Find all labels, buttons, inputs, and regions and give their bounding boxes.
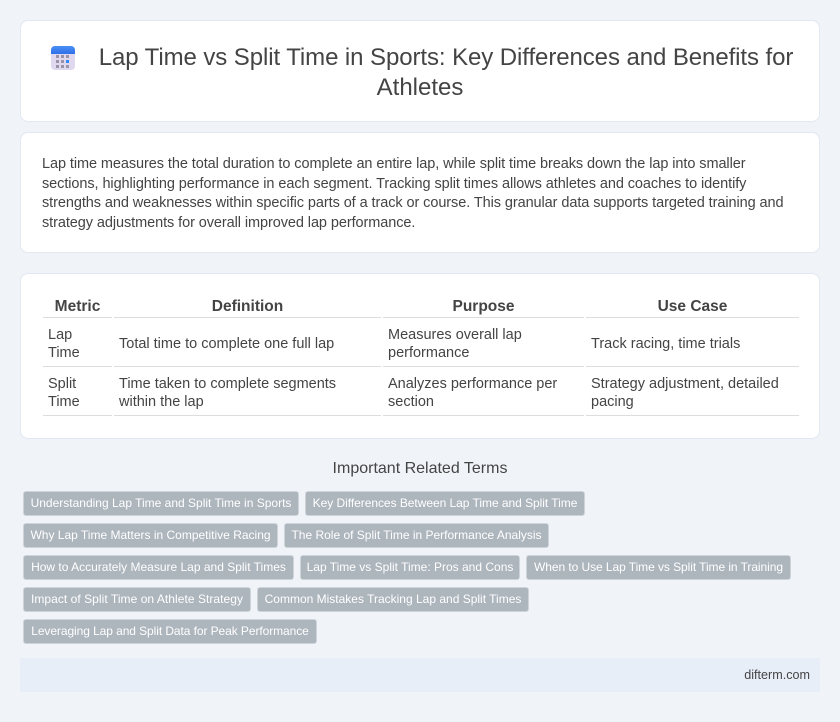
comparison table panel xyxy=(20,273,820,439)
table headers: Purpose xyxy=(452,298,514,315)
title: Lap Time vs Split Time in Sports: Key Differences and Benefits for xyxy=(99,44,793,71)
row: split time: pacing xyxy=(591,394,634,410)
related terms heading: Important Related Terms xyxy=(333,460,507,477)
intro paragraph: Lap time measures the total duration to complete an entire lap, while split time breaks down the lap into smaller xyxy=(42,156,745,172)
related terms tags: Impact of Split Time on Athlete Strategy xyxy=(31,592,243,606)
intro text panel xyxy=(20,132,820,253)
table headers: Metric xyxy=(55,298,100,315)
row: split time: Analyzes performance per xyxy=(388,376,557,392)
row: split time: Split xyxy=(48,376,76,392)
related terms tags xyxy=(23,491,791,644)
row: split time: Time xyxy=(48,394,80,410)
table headers: Use Case xyxy=(658,298,727,315)
row: lap time: performance xyxy=(388,345,469,361)
related terms tags: Common Mistakes Tracking Lap and Split Times xyxy=(265,592,521,606)
row: split time: Strategy adjustment, detailed xyxy=(591,376,779,392)
intro paragraph: strengths and weaknesses within specific parts of a track or course. This granular data supports targeted training and xyxy=(42,195,783,211)
footer bar xyxy=(20,658,820,692)
related terms tags: How to Accurately Measure Lap and Split Times xyxy=(31,560,286,574)
intro paragraph: sections, highlighting performance in each segment. Tracking split times allows athletes and coaches to identify xyxy=(42,176,746,192)
related terms tags: Why Lap Time Matters in Competitive Racing xyxy=(30,528,271,542)
row: split time: Time taken to complete segments xyxy=(119,376,336,392)
header panel xyxy=(20,20,820,122)
row: lap time: Track racing, time trials xyxy=(591,336,740,352)
row: lap time: Measures overall lap xyxy=(388,327,522,343)
related terms tags: Understanding Lap Time and Split Time in Sports xyxy=(31,496,291,510)
icon: calendar xyxy=(51,46,75,70)
intro paragraph: strategy adjustments for overall improved lap performance. xyxy=(42,214,415,230)
related terms tags: Key Differences Between Lap Time and Split Time xyxy=(313,496,577,510)
row: lap time xyxy=(48,327,740,361)
row: split time: within the lap xyxy=(119,394,204,410)
title: Athletes xyxy=(377,74,463,101)
row: lap time: Total time to complete one full lap xyxy=(119,336,334,352)
table headers xyxy=(55,298,727,315)
related terms tags: Lap Time vs Split Time: Pros and Cons xyxy=(307,560,513,574)
row: split time xyxy=(48,376,779,410)
related terms tags: The Role of Split Time in Performance Analysis xyxy=(291,528,542,542)
related terms tags: Leveraging Lap and Split Data for Peak Performance xyxy=(31,624,309,638)
row: lap time: Time xyxy=(48,345,80,361)
related terms tags: When to Use Lap Time vs Split Time in Training xyxy=(534,560,783,574)
row: split time: section xyxy=(388,394,434,410)
footer site name: difterm.com xyxy=(744,668,810,682)
intro paragraph xyxy=(42,156,783,230)
title xyxy=(99,44,793,101)
table headers: Definition xyxy=(212,298,283,315)
row: lap time: Lap xyxy=(48,327,72,343)
